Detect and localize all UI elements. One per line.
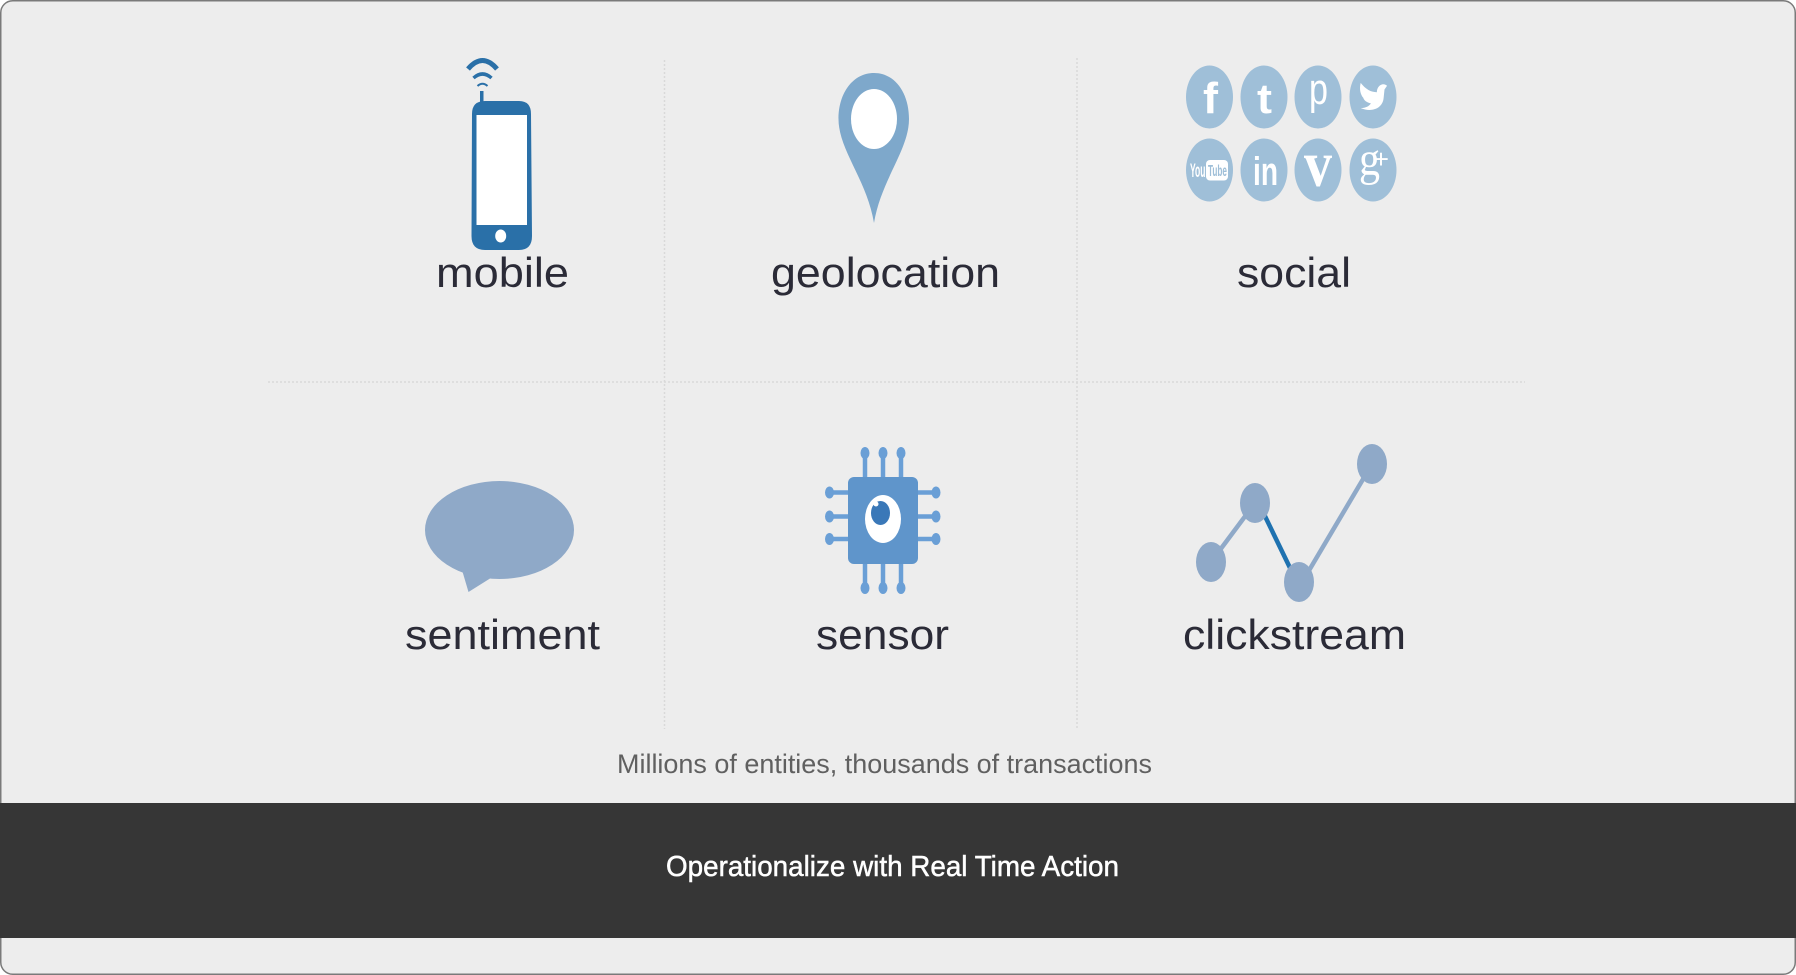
icon: mobile phone	[468, 60, 532, 250]
icon: social network badges: p	[1309, 65, 1328, 114]
icon: speech bubble	[425, 481, 574, 592]
label: geolocation: geolocation	[771, 249, 1000, 296]
caption: Millions of entities, thousands of transactions	[617, 749, 1152, 779]
label: sensor: sensor	[816, 611, 949, 658]
label: mobile: mobile	[436, 249, 569, 296]
panel: sensor	[816, 447, 949, 658]
panel: social	[1186, 65, 1396, 296]
panel: geolocation	[771, 73, 1000, 296]
icon: social network badges: You	[1190, 161, 1206, 182]
panel: sentiment	[405, 481, 600, 658]
icon: social network badges: in	[1253, 150, 1278, 194]
label: social: social	[1237, 249, 1351, 296]
icon: social network badges	[1186, 65, 1396, 202]
footer heading: Operationalize with Real Time Action	[666, 851, 1119, 883]
icon: social network badges: +	[1373, 144, 1389, 174]
panel: clickstream	[1183, 444, 1406, 658]
footer band	[0, 803, 1796, 938]
icon: social network badges: Tube	[1208, 163, 1227, 180]
icon: social network badges: t	[1257, 75, 1272, 122]
label: sentiment: sentiment	[405, 611, 600, 658]
icon: social network badges: g	[1359, 133, 1380, 186]
icon: social network badges: v	[1304, 128, 1332, 201]
icon: sensor chip with eye	[825, 447, 940, 594]
icon: map pin	[838, 73, 909, 223]
icon: clickstream line path	[1196, 444, 1387, 602]
icon: social network badges: f	[1203, 74, 1218, 123]
panel: mobile	[436, 60, 569, 296]
label: clickstream: clickstream	[1183, 611, 1406, 658]
